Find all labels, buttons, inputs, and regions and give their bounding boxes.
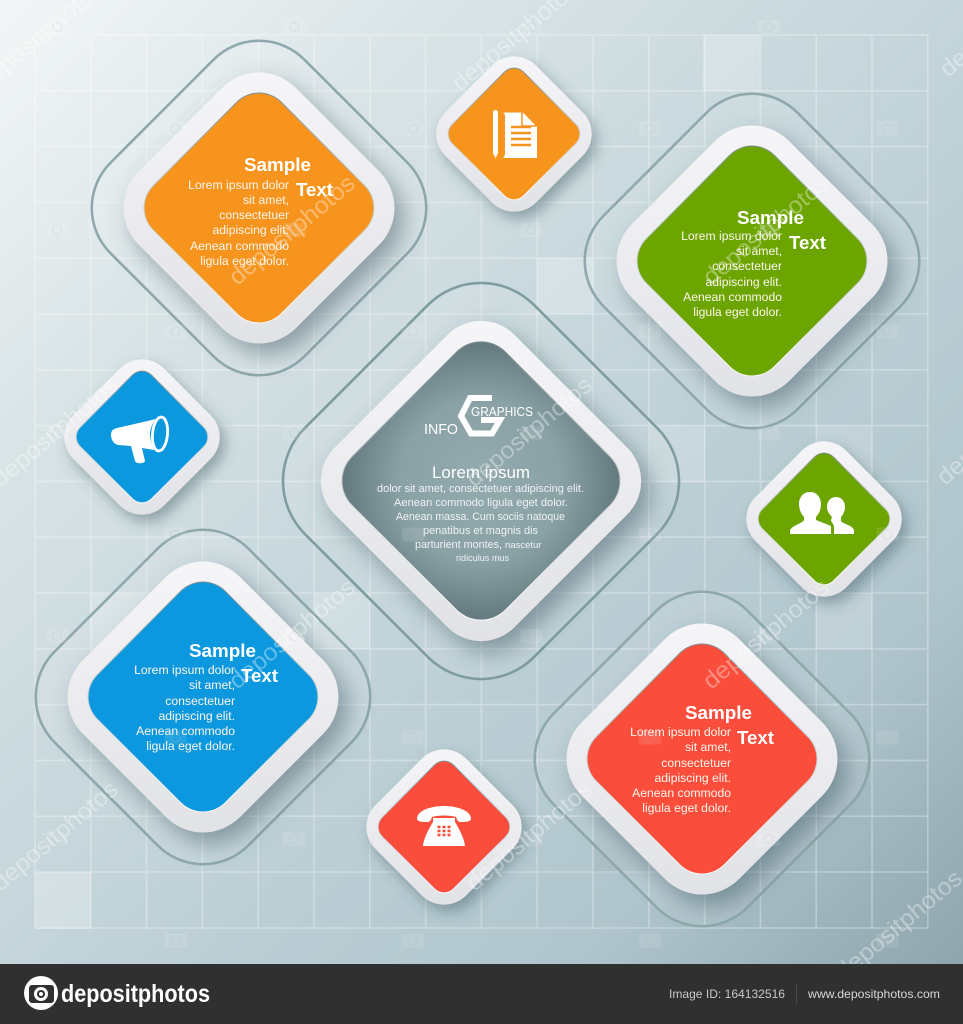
- text block: adipiscing elit.: [212, 223, 289, 237]
- icon tile: users: [733, 428, 915, 610]
- text block: Lorem ipsum dolor: [134, 663, 235, 677]
- footer image id: Image ID: 164132516: [669, 987, 785, 1001]
- text block: penatibus et magnis dis: [423, 525, 539, 537]
- text block: sit amet,: [685, 740, 731, 754]
- text block: consectetuer: [661, 756, 731, 770]
- text block: parturient montes, nascetur: [415, 539, 541, 551]
- text block: Lorem ipsum dolor: [681, 229, 782, 243]
- text block: Aenean commodo: [136, 724, 235, 738]
- text block: adipiscing elit.: [705, 275, 782, 289]
- text block: Aenean commodo: [632, 786, 731, 800]
- text block: [134, 663, 235, 753]
- heading: sample text: Sample: [685, 702, 752, 723]
- heading: lorem ipsum: Lorem ipsum: [432, 464, 530, 482]
- panel: red card: [508, 565, 896, 953]
- text block: [377, 483, 584, 564]
- text block: [188, 178, 289, 268]
- icon: megaphone: [111, 416, 169, 463]
- icon: camera logo: [24, 976, 58, 1010]
- text block: Aenean commodo: [683, 290, 782, 304]
- footer bar: [0, 964, 963, 1024]
- logo: info graphics: [424, 398, 533, 438]
- text block: consectetuer: [165, 694, 235, 708]
- text block: ridiculus mus: [456, 553, 509, 564]
- footer url: www.depositphotos.com: [807, 987, 940, 1001]
- text block: [630, 725, 731, 815]
- heading: sample text: [189, 640, 278, 686]
- text block: Aenean commodo ligula eget dolor.: [394, 497, 568, 509]
- heading: sample text: [685, 702, 774, 748]
- watermark layer: depositphotos: [224, 574, 361, 695]
- text block: adipiscing elit.: [654, 771, 731, 785]
- heading: sample text: Sample: [189, 640, 256, 661]
- icon tile: document: [423, 43, 605, 225]
- panel: green card: [558, 67, 946, 455]
- text block: ligula eget dolor.: [146, 739, 235, 753]
- watermark layer: depositphotos: [831, 865, 963, 986]
- watermark layer: depositphotos: [698, 170, 835, 291]
- footer brand: depositphotos: [61, 980, 210, 1008]
- text block: ligula eget dolor.: [200, 254, 289, 268]
- icon: document and pencil: [493, 110, 537, 158]
- icon: telephone: [417, 806, 471, 846]
- panel: blue card: [9, 503, 397, 891]
- logo: info graphics: GRAPHICS: [471, 404, 533, 419]
- heading: sample text: Sample: [737, 207, 804, 228]
- text block: Aenean commodo: [190, 239, 289, 253]
- icon tile: megaphone: [51, 346, 233, 528]
- panel: central card: [252, 252, 710, 710]
- logo: info graphics: INFO: [424, 421, 458, 438]
- text block: consectetuer: [219, 208, 289, 222]
- watermark layer: depositphotos: [224, 170, 361, 291]
- heading: sample text: Text: [737, 727, 774, 748]
- heading: sample text: [244, 154, 333, 200]
- panel: orange card: [65, 14, 453, 402]
- icon tile: telephone: [353, 736, 535, 918]
- watermark layer: depositphotos: [461, 776, 598, 897]
- watermark layer: depositphotos: [698, 574, 835, 695]
- icon: two people: [790, 492, 854, 534]
- text block: ligula eget dolor.: [642, 801, 731, 815]
- text block: Lorem ipsum dolor: [188, 178, 289, 192]
- text block: sit amet,: [736, 244, 782, 258]
- text block: sit amet,: [243, 193, 289, 207]
- text block: consectetuer: [712, 259, 782, 273]
- text block: Lorem ipsum dolor: [630, 725, 731, 739]
- text block: sit amet,: [189, 678, 235, 692]
- heading: sample text: Sample: [244, 154, 311, 175]
- text block: Aenean massa. Cum sociis natoque: [396, 511, 565, 523]
- heading: sample text: Text: [241, 665, 278, 686]
- text block: adipiscing elit.: [158, 709, 235, 723]
- heading: sample text: Text: [789, 232, 826, 253]
- watermark layer: depositphotos: [461, 372, 598, 493]
- text block: [681, 229, 782, 319]
- text block: dolor sit amet, consectetuer adipiscing elit.: [377, 483, 584, 495]
- heading: sample text: [737, 207, 826, 253]
- heading: sample text: Text: [296, 179, 333, 200]
- text block: ligula eget dolor.: [693, 305, 782, 319]
